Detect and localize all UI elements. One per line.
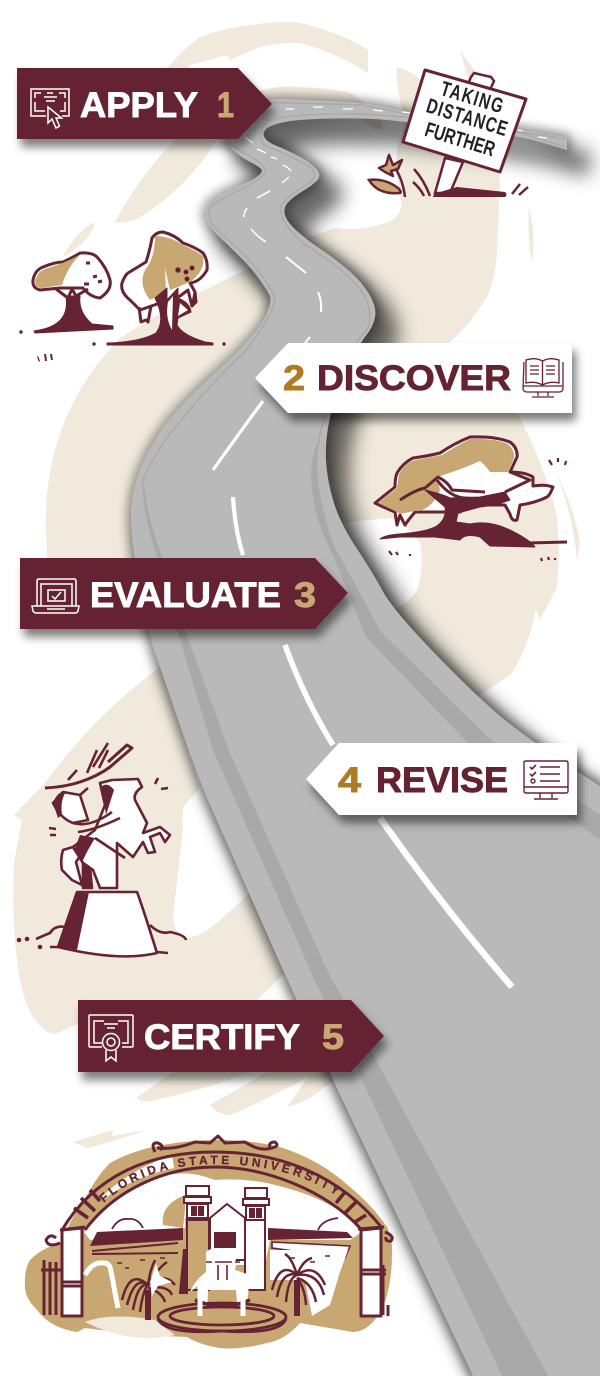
- illustration: tree one: [33, 253, 113, 333]
- road shadow soft: [131, 99, 600, 1376]
- icon: open book on monitor: [523, 359, 563, 397]
- left wall roof: [90, 1228, 183, 1246]
- brush: right sliver near sign: [528, 208, 533, 262]
- illustration: statue: [18, 743, 186, 956]
- horse body: [73, 779, 170, 888]
- right wall white: [270, 1250, 348, 1316]
- brush: left mid region: [46, 268, 272, 565]
- number 5: 5: [322, 1018, 344, 1057]
- banner: apply: [17, 68, 272, 139]
- number 2: 2: [283, 359, 305, 398]
- fountain white: [190, 1248, 250, 1315]
- white sky inside arch: [84, 1173, 362, 1265]
- fountain basin: [158, 1300, 286, 1332]
- tree canopy: [375, 437, 553, 525]
- pedestal shadow side: [58, 892, 89, 950]
- left wall bricks: [117, 1256, 330, 1268]
- gold swirl behind tower: [163, 1195, 185, 1228]
- horse rear leg: [83, 863, 92, 888]
- right pillar: [361, 1228, 381, 1316]
- left tower: [180, 1186, 211, 1293]
- brush: left swoosh: [115, 138, 217, 222]
- left palm: [122, 1260, 175, 1320]
- sign post: [435, 158, 463, 193]
- spear feathers: [68, 743, 108, 780]
- sign text: [422, 76, 511, 161]
- saddle dark: [75, 835, 95, 862]
- canopy gold: [378, 439, 514, 514]
- flower: [369, 155, 528, 197]
- canopy inner line: [400, 472, 530, 500]
- brush: top arc: [150, 22, 368, 90]
- right palm: [272, 1254, 325, 1316]
- illustration: sign: [369, 70, 528, 197]
- label: certify: CERTIFY: [144, 1018, 300, 1057]
- pillar scrolls: [46, 1232, 392, 1245]
- rider hair: [53, 792, 66, 818]
- icon: laptop with check: [32, 579, 79, 613]
- label: revise: REVISE: [376, 761, 508, 800]
- brush: second arc under road start: [255, 87, 382, 130]
- label: discover: DISCOVER: [317, 359, 511, 398]
- sign board: [403, 70, 526, 172]
- icon: monitor checklist: [524, 761, 568, 799]
- rider: [53, 792, 88, 823]
- spear: [45, 745, 132, 788]
- right tower: [243, 1188, 269, 1290]
- illustration: Florida State University gate: [24, 1134, 394, 1348]
- brush: lower left region: [13, 667, 285, 1034]
- sign text: FURTHER: [422, 117, 498, 161]
- tree dots and grass marks: [19, 330, 226, 362]
- right wall roof: [268, 1228, 353, 1240]
- arch lettering: FLORIDA STATE UNIVERSITY: [98, 1156, 339, 1202]
- statue marks: [49, 778, 168, 835]
- roof clouds: [112, 1218, 338, 1230]
- white tree outline left: [85, 1263, 118, 1308]
- pedestal: [58, 892, 157, 956]
- arch crest: [153, 1136, 277, 1152]
- tree ground: [490, 542, 567, 544]
- label: evaluate: EVALUATE: [90, 576, 281, 615]
- number 3: 3: [294, 576, 316, 615]
- brush: streaks under certify: [137, 1072, 345, 1115]
- horse neck shading: [102, 785, 114, 815]
- number 4: 4: [338, 761, 362, 800]
- left fence: [41, 1260, 62, 1315]
- sign text: TAKING: [438, 76, 506, 118]
- icon: certificate with ribbon: [89, 1015, 133, 1061]
- gold backdrop: [25, 1140, 392, 1348]
- brush: right sliver: [555, 470, 580, 560]
- rider sash and reins: [73, 788, 125, 858]
- arch outer and inner: [62, 1152, 382, 1230]
- banner: evaluate: [20, 558, 348, 629]
- number 1: 1: [217, 86, 234, 125]
- road centre dashes: [213, 107, 547, 987]
- pedestal ground: [36, 925, 186, 953]
- fountain details: [206, 1262, 240, 1280]
- label: apply: APPLY: [80, 86, 198, 125]
- road shadow deep: [148, 118, 600, 1376]
- illustration: bonsai tree: [375, 437, 567, 561]
- left wall battlement: [92, 1243, 178, 1254]
- banner: certify: [78, 1000, 384, 1072]
- fountain spouts: [200, 1282, 243, 1316]
- tree trunk: [380, 490, 535, 547]
- horse tail: [61, 847, 82, 885]
- right road band: [311, 440, 600, 840]
- banner: discover: [255, 343, 572, 413]
- arch ribs: [74, 1190, 366, 1222]
- sign ground: [433, 187, 506, 197]
- left pillar: [62, 1228, 82, 1316]
- left road band: [142, 482, 548, 1376]
- sign text: DISTANCE: [424, 93, 511, 141]
- brush: small streak above seal: [73, 1130, 147, 1148]
- central door: [214, 1232, 236, 1248]
- background brush strokes: [13, 22, 580, 1148]
- road edge lines: [142, 102, 565, 482]
- brush: sign backdrop and right-side region: [300, 50, 558, 697]
- tree marks: [389, 458, 566, 561]
- white left band: [99, 1155, 174, 1200]
- winding road: [131, 99, 600, 1376]
- banner: revise: [306, 743, 577, 815]
- illustration: tree two: [107, 232, 213, 345]
- sign handle: [468, 73, 494, 90]
- beige foreground patch: [85, 1316, 175, 1338]
- right fence: [383, 1265, 388, 1316]
- central pediment: [210, 1204, 245, 1260]
- icon: screen with cursor: [31, 89, 69, 128]
- brush: small leaf: [63, 222, 95, 257]
